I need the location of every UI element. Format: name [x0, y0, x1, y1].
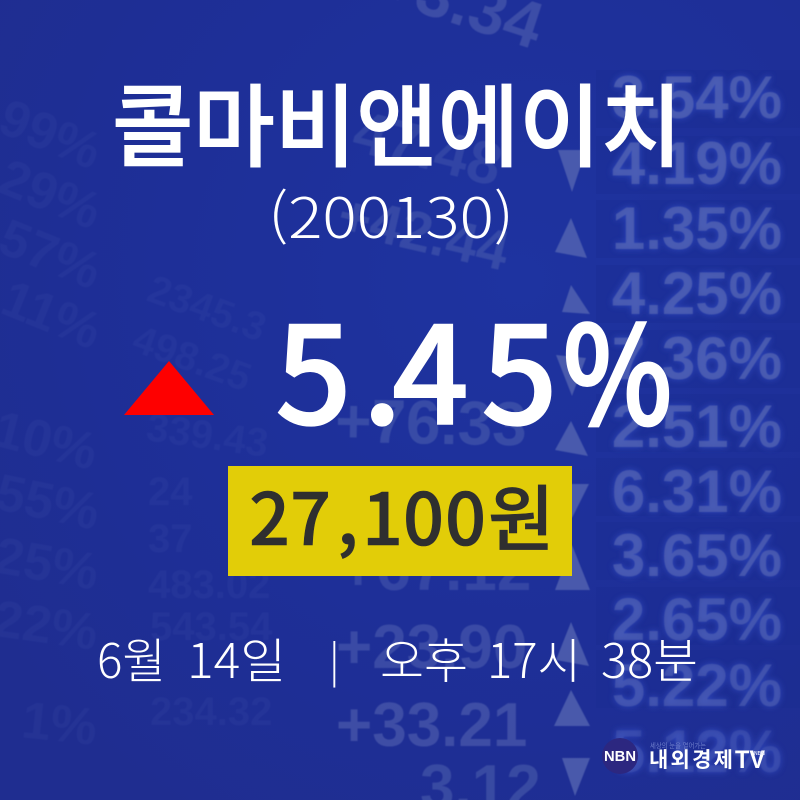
ticker column: centre numbers: +33.21 — [336, 691, 527, 760]
date and time: 14일 — [187, 622, 286, 692]
ticker column: left percentages — [0, 88, 109, 757]
logo: NBN circle badge: NBN — [604, 748, 636, 765]
date and time — [97, 622, 698, 692]
logo: wordmark: 내외경제 — [649, 744, 733, 774]
ticker column: centre faint numbers: 543.54 — [150, 605, 273, 649]
price value: 27,100원 — [249, 461, 554, 566]
ticker column: right percentages glow: 5.22% — [612, 652, 782, 719]
ticker column: centre faint numbers: 339.43 — [144, 405, 271, 466]
ticker column: centre faint numbers — [127, 267, 273, 734]
ticker column: right percentages: 5.12% — [612, 718, 782, 785]
ticker column: centre faint numbers: 2345.3 — [142, 267, 272, 350]
change percentage: 5.45 — [275, 267, 558, 463]
ticker column: right percentages: 4.19% — [612, 130, 782, 197]
ticker column: right percentages: 3.54% — [612, 64, 782, 131]
logo: small NBN: NBN — [754, 751, 765, 757]
logo: NBN circle badge — [602, 738, 638, 774]
ticker column: right percentages glow: 4.19% — [612, 130, 782, 197]
ticker column: right percentages glow: 2.65% — [612, 586, 782, 653]
ticker column: right percentages: 4.25% — [612, 260, 782, 327]
ticker column: right percentages glow: 3.65% — [612, 522, 782, 589]
date and time: 6월 — [97, 622, 166, 692]
ticker triangles — [554, 150, 590, 796]
ticker rows: dark panels — [596, 70, 800, 708]
ticker column: centre faint numbers: 498.25 — [127, 317, 257, 400]
ticker column: right percentages: 7.36% — [612, 325, 782, 392]
date and time: | — [329, 628, 340, 689]
ticker column: right percentages glow: 2.51% — [612, 393, 782, 460]
ticker column: right percentages: 5.22% — [612, 652, 782, 719]
ticker column: centre numbers: +76.33 — [335, 387, 527, 459]
ticker column: right percentages glow: 5.12% — [612, 718, 782, 785]
change percentage: % — [563, 269, 672, 464]
ticker column: right percentages glow: 1.35% — [612, 195, 782, 262]
ticker column: centre numbers: +67.12 — [340, 535, 531, 604]
ticker column: centre numbers: +42.44 — [332, 182, 515, 283]
ticker column: left percentages: 1% — [19, 691, 100, 757]
title: company name: 콜마비앤에이치 — [112, 55, 682, 185]
ticker column: right percentages glow — [612, 64, 782, 785]
date and time: 오후 — [380, 622, 468, 692]
ticker column: right percentages: 6.31% — [612, 458, 782, 525]
ticker column: right percentages glow: 7.36% — [612, 325, 782, 392]
ticker column: right percentages glow: 6.31% — [612, 458, 782, 525]
stock code: (200130) — [268, 174, 514, 255]
logo: NBN 내외경제TV — [602, 738, 765, 774]
ticker column: centre numbers: +23.90 — [336, 613, 527, 682]
icon: red up triangle — [124, 361, 214, 415]
date and time: 17시 — [487, 622, 581, 692]
ticker column: centre faint numbers: 37 — [148, 517, 192, 561]
ticker column: centre numbers: 47.48 — [347, 98, 509, 199]
ticker column: right percentages: 1.35% — [612, 195, 782, 262]
logo: tagline: 세상의 눈을 열어가는 — [650, 741, 706, 751]
ticker column: right percentages: 3.65% — [612, 522, 782, 589]
ticker column: centre faint numbers: 234.32 — [150, 690, 272, 734]
ticker column: right percentages glow: 3.54% — [612, 64, 782, 131]
ticker column: right percentages: 2.65% — [612, 586, 782, 653]
ticker column: centre numbers — [332, 0, 553, 800]
ticker column: centre faint numbers: 24 — [148, 470, 193, 514]
ticker column: right percentages glow: 4.25% — [612, 260, 782, 327]
ticker column: right percentages: 2.51% — [612, 393, 782, 460]
ticker column: centre faint numbers: 483.02 — [148, 563, 270, 607]
logo: TV: TV — [735, 746, 765, 774]
date and time: 38분 — [601, 622, 698, 692]
ticker column: right percentages — [612, 64, 782, 785]
price box — [228, 461, 572, 576]
